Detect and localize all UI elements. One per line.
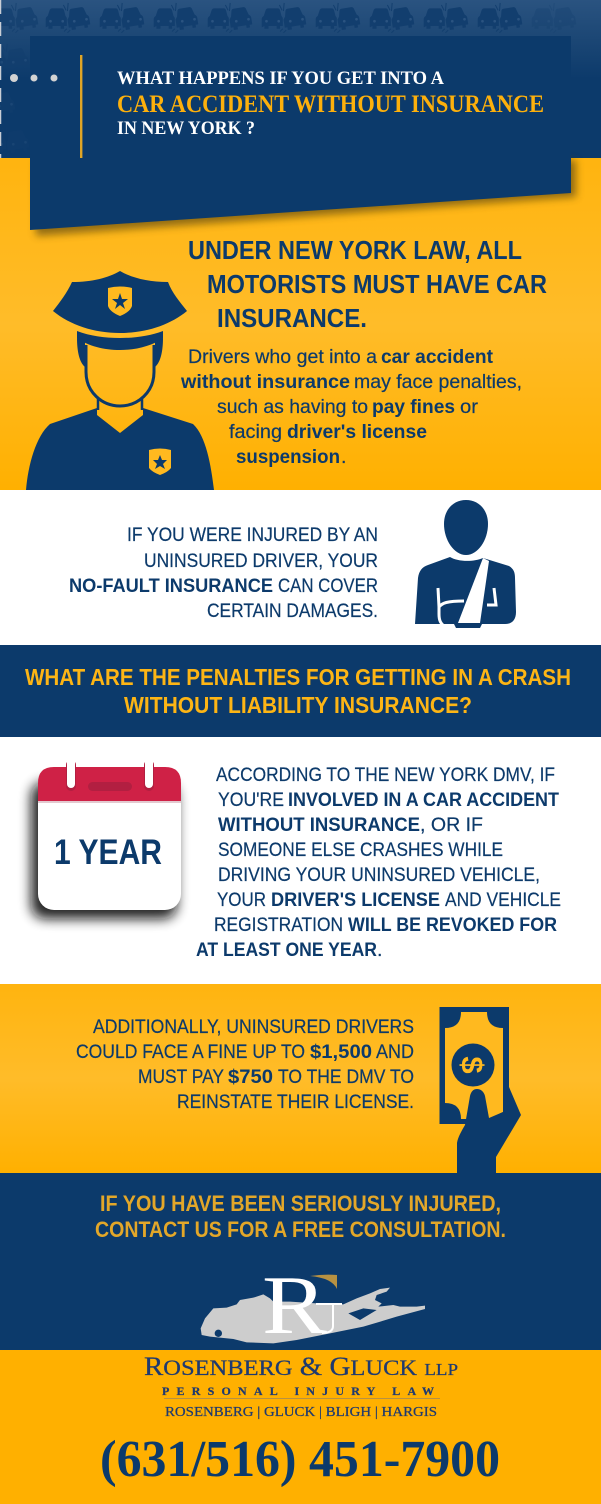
text block: no-fault insurance: NO-FAULT INSURANCE — [69, 575, 273, 597]
icon: hand holding dollar bill: $ — [455, 1056, 490, 1074]
logo wordmark: ROSENBERG & G LUCK LLP — [144, 1352, 458, 1381]
text block: penalties summary: driver's license — [287, 421, 427, 443]
text block: no-fault insurance: IF YOU WERE INJURED BY AN — [127, 524, 378, 546]
phone number: (631/516) 451-7900 — [100, 1431, 500, 1488]
title: WHAT HAPPENS IF YOU GET INTO A — [117, 68, 444, 89]
text block: fines: AND — [376, 1041, 414, 1063]
panel: yellow fines section — [0, 984, 601, 1173]
text block: DMV revocation: ACCORDING TO THE NEW YORK DMV, IF — [216, 764, 555, 786]
text block: penalties summary: facing — [229, 421, 282, 443]
heading band: penalties question — [0, 645, 601, 737]
panel: white one-year section — [0, 737, 601, 984]
text block: penalties summary — [180, 346, 522, 468]
panel: contact call to action — [0, 1173, 601, 1352]
title — [117, 68, 544, 139]
text block: DMV revocation: DRIVING YOUR UNINSURED VEHICLE, — [218, 864, 540, 886]
icon: police officer — [26, 271, 214, 490]
text block: DMV revocation: INVOLVED IN A CAR ACCIDENT — [288, 789, 559, 811]
text block: penalties summary: car accident — [381, 346, 493, 368]
panel shadow — [36, 160, 576, 236]
logo wordmark: PERSONAL INJURY LAW — [162, 1384, 439, 1398]
text block: no-fault insurance: CERTAIN DAMAGES. — [207, 600, 378, 622]
text block: DMV revocation: YOUR — [217, 889, 266, 911]
heading: NY law: MOTORISTS MUST HAVE CAR — [207, 269, 547, 299]
text block: fines: $750 — [228, 1066, 273, 1088]
heading: NY law — [188, 235, 547, 333]
text block: fines: ADDITIONALLY, UNINSURED DRIVERS — [93, 1016, 414, 1038]
text block: penalties summary: suspension — [236, 446, 340, 468]
text block: DMV revocation: AND VEHICLE — [445, 889, 561, 911]
pattern: crashed cars — [0, 3, 577, 156]
title accent rule — [80, 55, 82, 158]
text block: DMV revocation: AT LEAST ONE YEAR — [196, 939, 377, 961]
logo mark: Long Island with RG monogram: R — [262, 1259, 327, 1352]
text block: penalties summary: or — [460, 396, 479, 418]
text block: DMV revocation: REGISTRATION — [214, 914, 343, 936]
text block: DMV revocation: YOU'RE — [218, 789, 284, 811]
panel: title card — [10, 36, 571, 230]
background: header band — [0, 0, 601, 158]
text block: penalties summary: Drivers who get into a — [188, 346, 377, 368]
logo wordmark: ROSENBERG | GLUCK | BLIGH | HARGIS — [165, 1405, 437, 1420]
call to action text: IF YOU HAVE BEEN SERIOUSLY INJURED, — [100, 1191, 501, 1216]
logo wordmark — [144, 1352, 458, 1420]
text block: DMV revocation: WITHOUT INSURANCE — [218, 814, 420, 836]
text block: DMV revocation: SOMEONE ELSE CRASHES WHILE — [218, 839, 503, 861]
text block: fines — [76, 1016, 414, 1113]
icon: injured person with arm sling — [415, 500, 516, 628]
text block: fines: REINSTATE THEIR LICENSE. — [177, 1091, 414, 1113]
text block: fines: MUST PAY — [138, 1066, 224, 1088]
text block: no-fault insurance: CAN COVER — [278, 575, 378, 597]
text block: DMV revocation: DRIVER'S LICENSE — [271, 889, 440, 911]
text block: penalties summary: without insurance — [180, 371, 350, 393]
panel: footer — [0, 1350, 601, 1504]
heading: NY law: UNDER NEW YORK LAW, ALL — [188, 235, 522, 265]
icon: hat badge — [108, 286, 132, 316]
icon: calendar — [31, 757, 181, 919]
logo mark: Long Island with RG monogram — [201, 1259, 425, 1352]
text block: penalties summary: such as having to — [217, 396, 368, 418]
text block: DMV revocation — [196, 764, 561, 961]
text block: penalties summary: . — [341, 446, 346, 468]
heading: NY law: INSURANCE. — [217, 303, 367, 333]
text block: fines: COULD FACE A FINE UP TO — [76, 1041, 305, 1063]
heading band: penalties question: WITHOUT LIABILITY INSURANCE? — [124, 692, 472, 718]
text block: penalties summary: may face penalties, — [354, 371, 522, 393]
icon: three dots — [10, 74, 58, 82]
panel: no-fault white section — [0, 490, 601, 645]
text block: no-fault insurance: UNINSURED DRIVER, YOUR — [144, 550, 378, 572]
text block: fines: TO THE DMV TO — [278, 1066, 414, 1088]
text block: fines: $1,500 — [310, 1041, 372, 1063]
calendar label: 1 YEAR — [54, 833, 162, 872]
title: IN NEW YORK ? — [117, 118, 255, 139]
text block: DMV revocation: , OR IF — [420, 814, 483, 836]
call to action text — [95, 1191, 506, 1242]
text block: DMV revocation: WILL BE REVOKED FOR — [348, 914, 557, 936]
text block: no-fault insurance — [69, 524, 378, 622]
background: yellow police section — [0, 158, 601, 490]
text block: DMV revocation: . — [377, 939, 382, 961]
title: CAR ACCIDENT WITHOUT INSURANCE — [117, 91, 544, 118]
text block: penalties summary: pay fines — [372, 396, 455, 418]
left edge artifacts — [0, 0, 2, 158]
call to action text: CONTACT US FOR A FREE CONSULTATION. — [95, 1217, 506, 1242]
icon: chest badge — [149, 448, 171, 475]
icon: hand holding dollar bill — [440, 1007, 521, 1173]
